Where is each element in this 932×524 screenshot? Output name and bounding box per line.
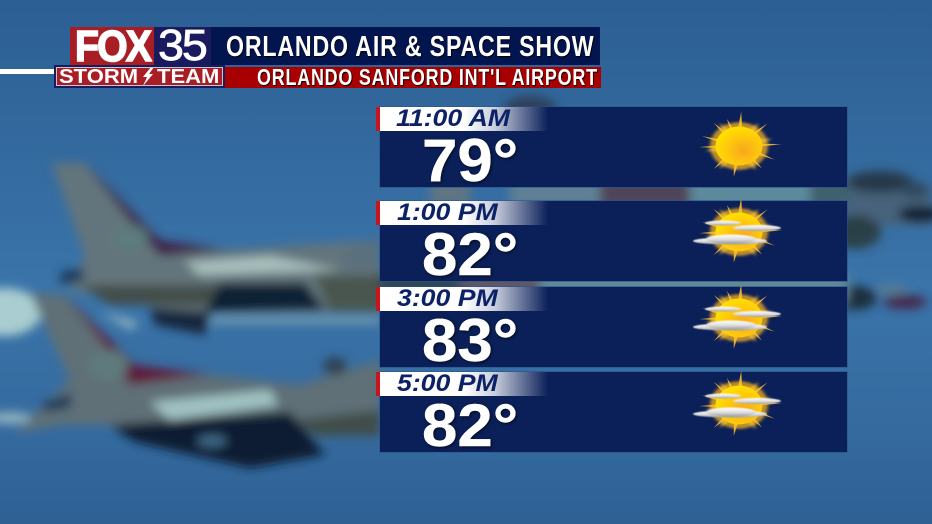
panel: 5:00 PM forecast: [376, 370, 848, 459]
time: 5:00 PM: 5:00 PM: [397, 370, 498, 397]
time: 3:00 PM: 3:00 PM: [397, 285, 498, 312]
subtitle banner: ORLANDO SANFORD INT'L AIRPORT: [257, 64, 598, 90]
icon: partly cloudy: [692, 283, 782, 349]
white broadcast line: [0, 69, 55, 74]
time: 1:00 PM: 1:00 PM: [397, 199, 498, 226]
icon: partly cloudy: [692, 370, 782, 436]
right side jets: [848, 185, 932, 225]
logo: FOX 35: [70, 27, 211, 65]
panel: 1:00 PM forecast: [376, 197, 848, 288]
time: 11:00 AM: 11:00 AM: [396, 105, 510, 132]
upper jet: [52, 163, 380, 312]
logo: Storm Team badge: [54, 65, 225, 88]
panel: 3:00 PM forecast: [376, 283, 848, 374]
temperature: 83: 83°: [422, 307, 518, 374]
temperature: 82: 82°: [422, 392, 518, 459]
icon: partly cloudy: [692, 197, 782, 263]
gaps between panels: [430, 175, 470, 207]
white cloud patches: [0, 288, 41, 336]
temperature: 79: 79°: [422, 127, 518, 194]
temperature: 82: 82°: [422, 221, 518, 288]
panel: 11:00 AM forecast: [376, 105, 848, 194]
icon: sun: [700, 111, 782, 177]
lower jet: [15, 293, 380, 433]
title banner: ORLANDO AIR & SPACE SHOW: [226, 31, 594, 63]
